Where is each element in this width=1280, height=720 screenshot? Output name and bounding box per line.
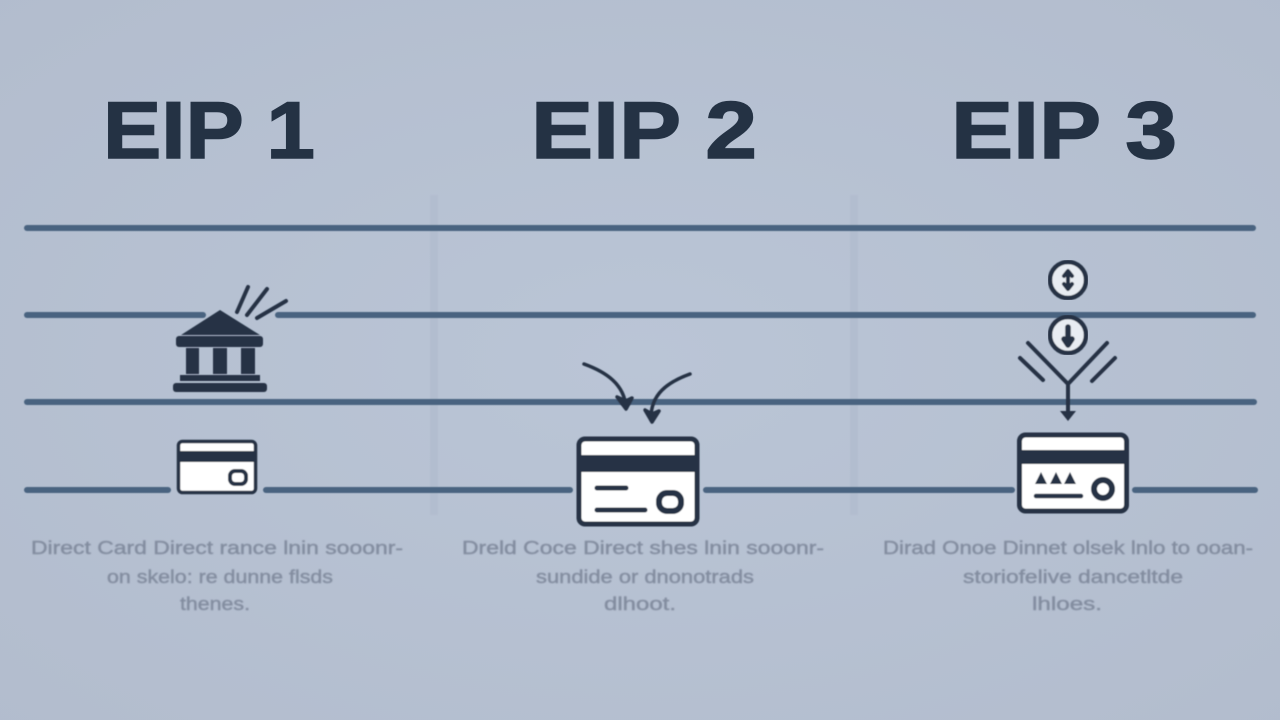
description: EIP 2: [462, 538, 824, 614]
description: EIP 1: Direct Card Direct rance lnin sooonr-: [31, 538, 403, 558]
horizontal timeline rules: [27, 228, 1255, 490]
description: EIP 1: [31, 538, 403, 614]
icon: credit card small: [178, 442, 256, 492]
description: EIP 3: [883, 538, 1253, 614]
panel: EIP 3: [883, 86, 1253, 614]
icon: credit card with stars: [1020, 435, 1126, 511]
icon: credit card large: [579, 439, 697, 524]
heading: EIP 2: EIP 2: [531, 86, 757, 176]
description: EIP 3: lhloes.: [1032, 594, 1102, 614]
description: EIP 2: dlhoot.: [604, 594, 676, 614]
icon: lower coin: [1050, 317, 1086, 353]
description: EIP 3: storiofelive dancetltde: [963, 567, 1183, 587]
heading: EIP 3: EIP 3: [951, 86, 1177, 176]
description: EIP 2: sundide or dnonotrads: [536, 567, 754, 587]
description: EIP 2: Dreld Coce Direct shes lnin sooonr-: [462, 538, 824, 558]
description: EIP 3: Dirad Onoe Dinnet olsek lnlo to ooan-: [883, 538, 1253, 558]
icon: upper coin: [1050, 262, 1086, 298]
panel: EIP 1: [31, 86, 403, 614]
icon: funnel arrow: [1020, 343, 1115, 421]
icon: bank: [173, 287, 286, 392]
heading: EIP 1: EIP 1: [103, 86, 315, 176]
panel: EIP 2: [462, 86, 824, 614]
description: EIP 1: on skelo: re dunne flsds: [107, 567, 333, 587]
icon: converging arrows: [584, 364, 690, 422]
description: EIP 1: thenes.: [180, 594, 250, 614]
